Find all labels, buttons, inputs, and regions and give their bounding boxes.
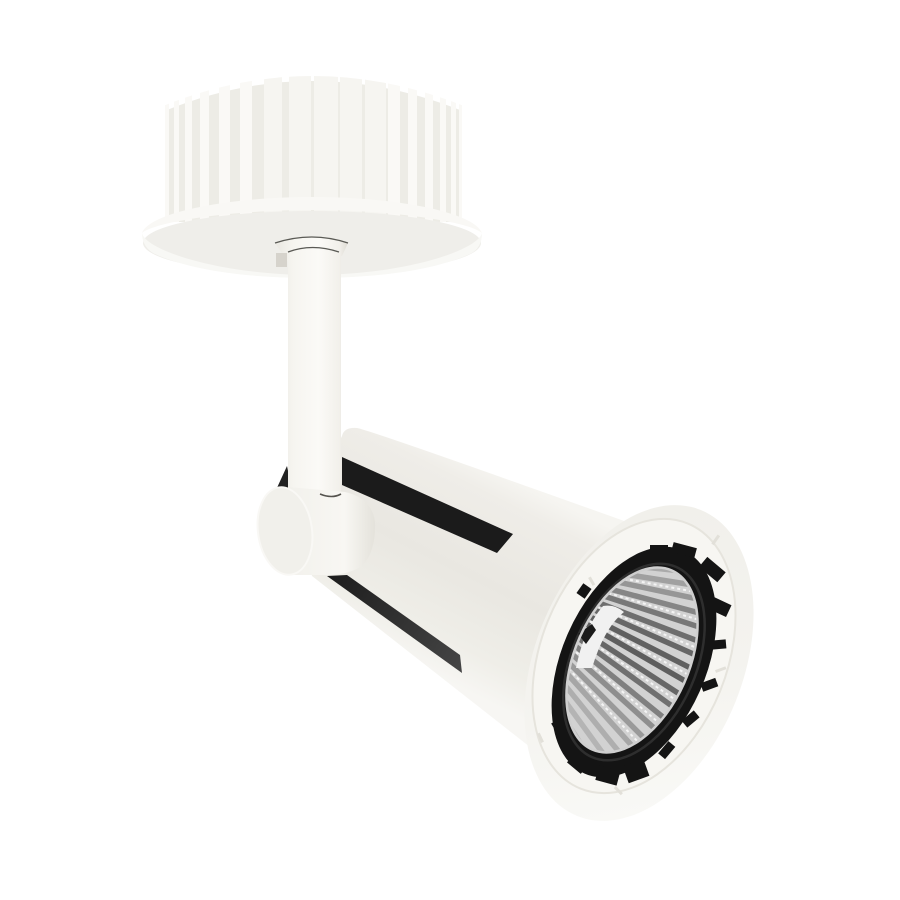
reflector chevron sparkle — [570, 579, 696, 741]
pivot knuckle — [252, 484, 375, 578]
ribbed ceiling housing — [165, 76, 462, 222]
conical lamp body — [300, 428, 660, 747]
mounting flange disc — [142, 197, 482, 278]
reflector left white highlight — [576, 606, 624, 668]
knuckle end cap — [252, 484, 318, 578]
collar grooves — [275, 237, 348, 252]
silver faceted reflector — [565, 566, 699, 754]
ring teeth — [551, 542, 732, 786]
vertical stem with collar — [275, 236, 348, 497]
bezel notch marks — [537, 535, 726, 795]
product photo: white ceiling spotlight — [142, 76, 754, 820]
lower black slot — [327, 575, 462, 673]
reflector lens rim — [540, 547, 724, 773]
LED notch — [578, 624, 596, 644]
housing ribs — [165, 76, 462, 222]
front flared bezel — [481, 471, 797, 855]
upper black slot — [342, 457, 513, 553]
ring sheen — [535, 542, 733, 782]
reflector radial facets — [568, 568, 696, 751]
black retaining ring with teeth — [519, 521, 749, 803]
collar shadow — [276, 253, 287, 267]
inner raised ring — [494, 489, 774, 823]
rear black slit behind stem — [276, 466, 292, 490]
stem joint shadow — [320, 494, 341, 496]
